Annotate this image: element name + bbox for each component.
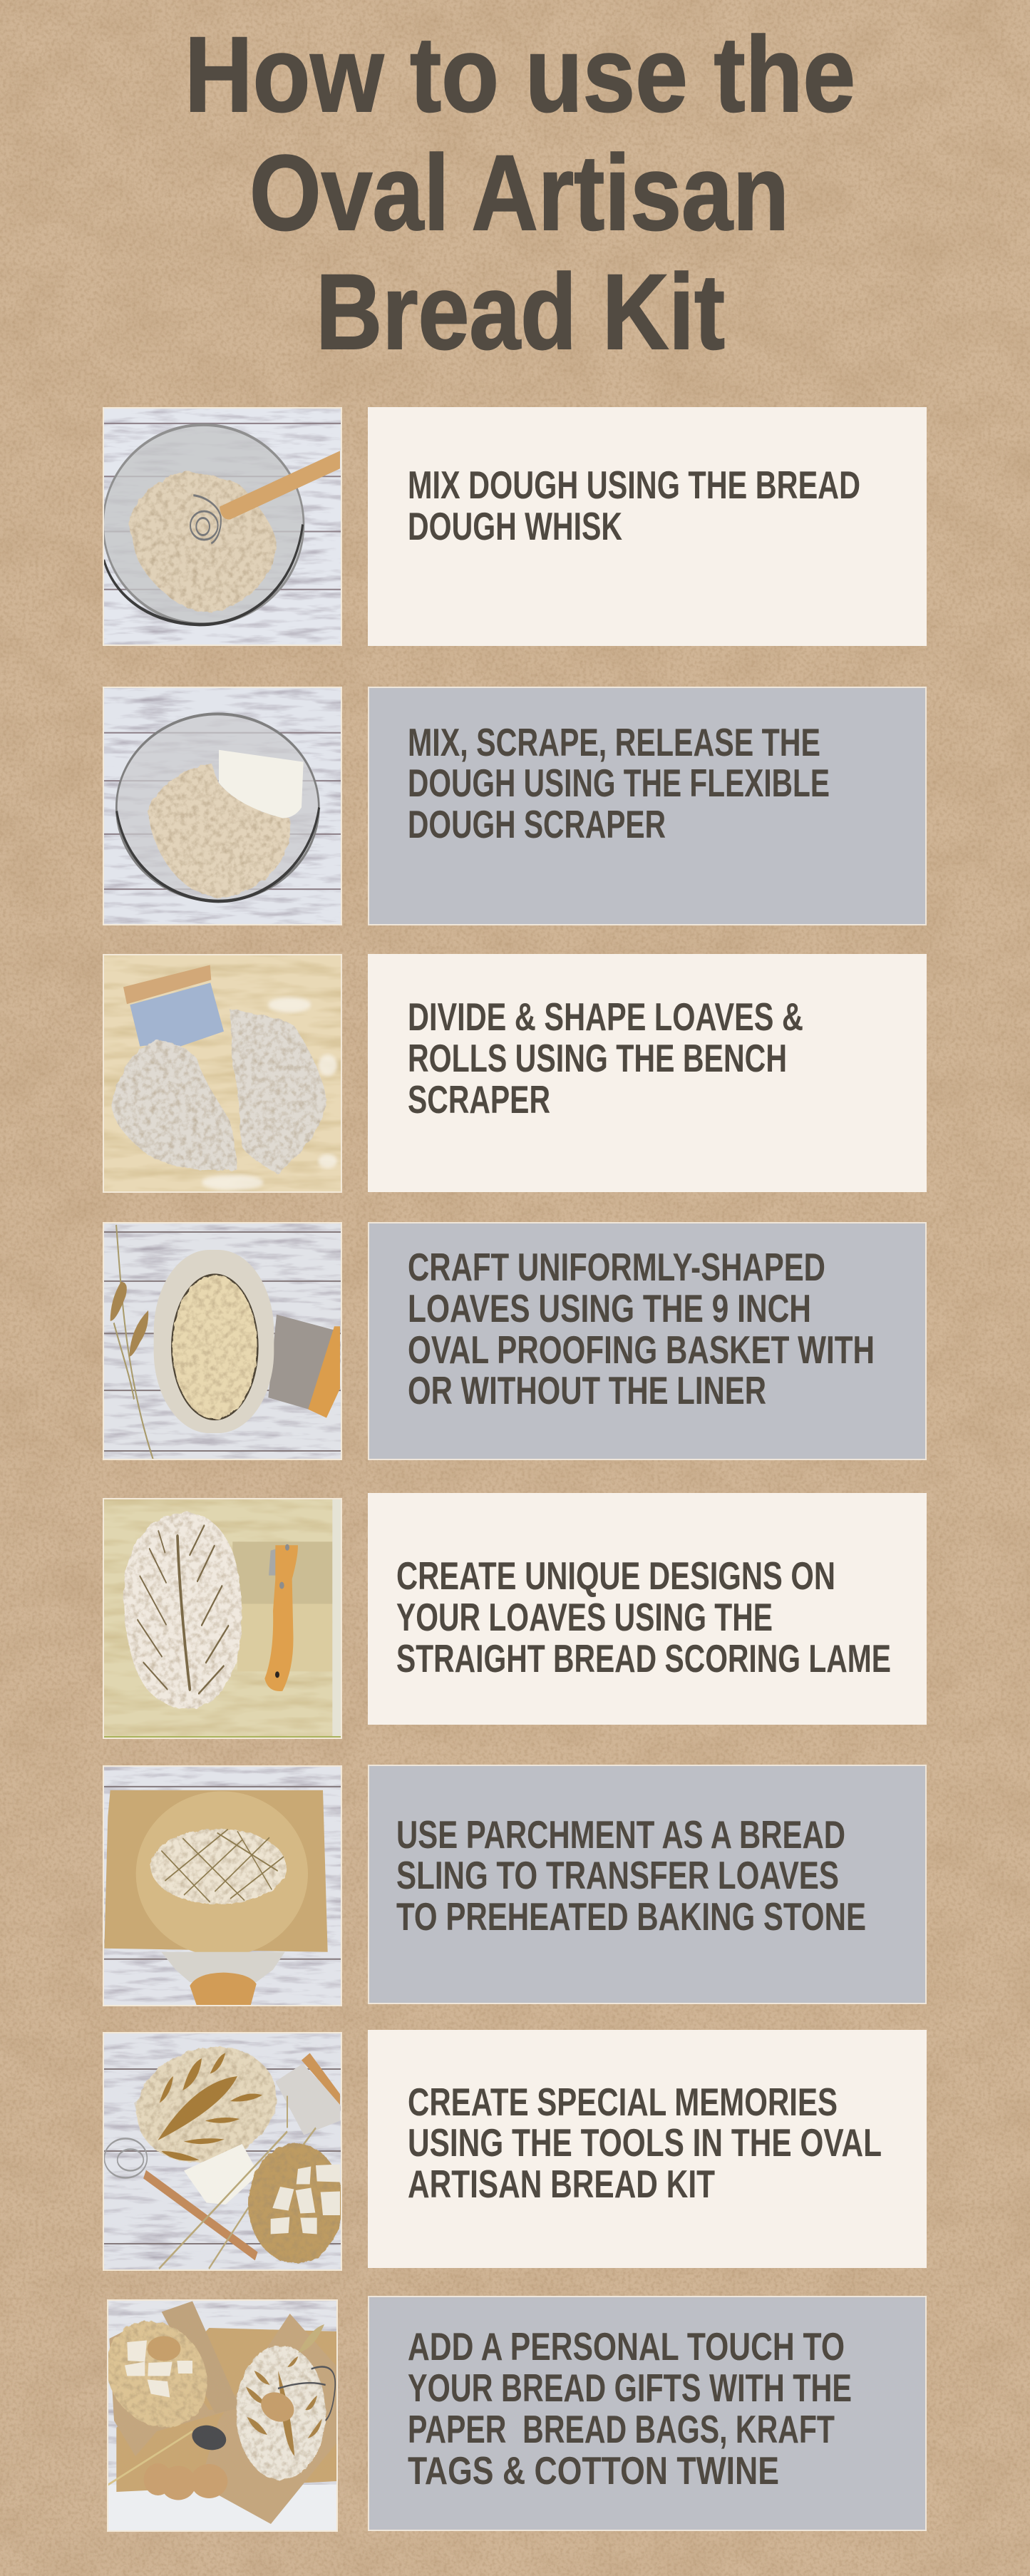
text panel 7: ARTISAN BREAD KIT [408,2162,715,2206]
step 3 [103,954,927,1193]
photo: wrapped loaves, paper bags, tags and twine [108,2301,336,2530]
text panel 3: DIVIDE & SHAPE LOAVES & [408,995,803,1039]
text panel 2 [369,687,926,925]
text panel 4: OR WITHOUT THE LINER [408,1368,766,1412]
text panel 4 [369,1223,926,1459]
text panel 5: YOUR LOAVES USING THE [396,1595,773,1639]
text panel 6: SLING TO TRANSFER LOAVES [396,1853,839,1897]
text panel 2: DOUGH USING THE FLEXIBLE [408,761,830,805]
text panel 3: ROLLS USING THE BENCH [408,1036,787,1080]
text panel 7: USING THE TOOLS IN THE OVAL [408,2120,882,2165]
step 2 [103,687,926,925]
step 4 [103,1222,926,1460]
step 1 [103,407,927,646]
text panel 3: SCRAPER [408,1077,550,1122]
text panel 4: LOAVES USING THE 9 INCH [408,1286,811,1330]
photo: scored loaf and bread lame [104,1499,341,1738]
photo: dough in oval proofing basket [104,1223,341,1459]
step 6 [103,1765,926,2006]
photo: scraping dough with flexible scraper [104,688,341,924]
text panel 6 [369,1765,926,2003]
photo: loaf on parchment sling and peel [104,1767,341,2005]
step 5 [103,1493,927,1739]
text panel 3 [368,954,927,1192]
text panel 4: CRAFT UNIFORMLY-SHAPED [408,1245,825,1289]
text panel 5 [368,1493,927,1725]
text panel 6: TO PREHEATED BAKING STONE [396,1894,866,1939]
photo: mixing dough with whisk in glass bowl [104,409,341,645]
title: Oval Artisan [249,133,789,252]
photo: divided dough with bench scraper [104,955,341,1191]
text panel 8: TAGS & COTTON TWINE [408,2448,779,2493]
text panel 7 [368,2030,927,2268]
text panel 2: MIX, SCRAPE, RELEASE THE [408,720,820,764]
text panel 8 [369,2297,926,2530]
text panel 1 [368,407,927,646]
text panel 6: USE PARCHMENT AS A BREAD [396,1812,845,1857]
step 7 [103,2030,927,2271]
text panel 1: DOUGH WHISK [408,504,622,548]
text panel 1: MIX DOUGH USING THE BREAD [408,463,860,507]
text panel 8: YOUR BREAD GIFTS WITH THE [408,2366,852,2410]
title: Bread Kit [316,252,725,371]
text panel 2: DOUGH SCRAPER [408,802,666,846]
text panel 8: ADD A PERSONAL TOUCH TO [408,2324,845,2369]
text panel 5: CREATE UNIQUE DESIGNS ON [396,1554,835,1598]
title: How to use the [185,14,855,134]
text panel 4: OVAL PROOFING BASKET WITH [408,1328,875,1372]
title [185,14,855,371]
text panel 8: PAPER BREAD BAGS, KRAFT [408,2407,835,2451]
photo: finished loaves with kit tools [104,2033,341,2269]
step 8 [100,2297,926,2532]
text panel 7: CREATE SPECIAL MEMORIES [408,2080,838,2124]
